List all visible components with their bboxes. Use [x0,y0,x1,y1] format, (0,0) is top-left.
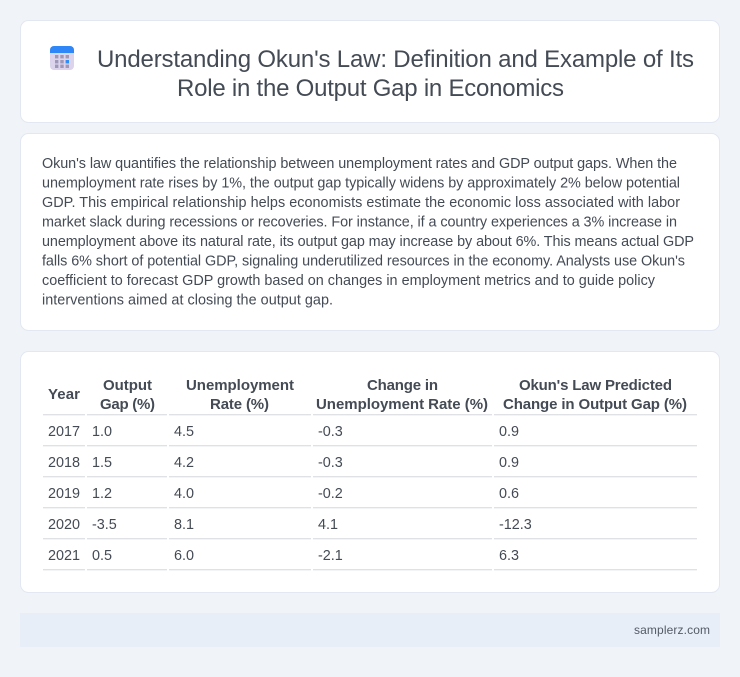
text block: description: market slack during recessions or recoveries. For instance, if a country experiences a 3% increase in [42,214,677,230]
table row: 2019: 1.2 [92,486,112,502]
table row: 2019: 2019 [48,486,80,502]
table row: 2021: 0.5 [92,548,112,564]
table row: 2018: -0.3 [318,455,343,471]
table row: 2021: 6.3 [499,548,519,564]
table header: Unemployment Rate (%) [316,396,488,413]
table row: 2017: 1.0 [92,424,112,440]
table row: 2018 [48,455,519,471]
table header: Rate (%) [210,396,269,413]
table row: 2018: 2018 [48,455,80,471]
table row: 2018: 4.2 [174,455,194,471]
table header: Change in Output Gap (%) [503,396,687,413]
table row: 2018: 1.5 [92,455,112,471]
footer text: samplerz.com [634,623,710,637]
table row: 2017: 0.9 [499,424,519,440]
table row: 2017 [48,424,519,440]
title: Role in the Output Gap in Economics [177,75,564,102]
table row: 2020: -3.5 [92,517,117,533]
table row: 2021 [48,548,519,564]
table row: 2020: -12.3 [499,517,532,533]
text block: description [42,156,694,308]
table row: 2019: 4.0 [174,486,194,502]
table row: 2019: 0.6 [499,486,519,502]
table header: Okun's Law Predicted [519,377,672,394]
table row: 2020 [48,517,532,533]
text block: description: interventions aimed at closing the output gap. [42,292,333,308]
table row: 2019 [48,486,519,502]
panel: data table [20,352,720,592]
text block: description: falls 6% short of potential GDP, signaling underutilized resources in the economy. Analysts use Okun's [42,254,685,270]
text block: description: unemployment rate rises by 1%, the output gap typically widens by approximately 2% below potential [42,176,680,192]
table row: 2021: 2021 [48,548,80,564]
text block: description: unemployment above its natural rate, its output gap may increase by about 6%. This means actual GDP [42,234,694,250]
title: Understanding Okun's Law: Definition and Example of Its [97,46,694,73]
table row: 2021: 6.0 [174,548,194,564]
table row rules [43,414,697,570]
table header: Unemployment [186,377,294,394]
icon: calendar [50,46,74,70]
table row: 2020: 4.1 [318,517,338,533]
text block: description: coefficient to forecast GDP growth based on changes in employment metrics and to guide policy [42,273,656,289]
panel: description [20,134,720,330]
table header [48,377,687,413]
table row: 2021: -2.1 [318,548,343,564]
footer bar [20,613,720,647]
table row: 2017: 4.5 [174,424,194,440]
panel: title card [20,20,720,122]
table row: 2020: 2020 [48,517,80,533]
text block: description: Okun's law quantifies the relationship between unemployment rates and GDP output gaps. When the [42,156,677,172]
table header: Change in [367,377,438,394]
text block: description: GDP. This empirical relationship helps economists estimate the economic loss associated with labor [42,195,680,211]
table row: 2020: 8.1 [174,517,194,533]
table row: 2017: -0.3 [318,424,343,440]
table header: Gap (%) [100,396,155,413]
title [97,46,694,102]
table header: Output [103,377,152,394]
table row: 2018: 0.9 [499,455,519,471]
table header: Year [48,386,80,403]
table row: 2017: 2017 [48,424,80,440]
table row: 2019: -0.2 [318,486,343,502]
